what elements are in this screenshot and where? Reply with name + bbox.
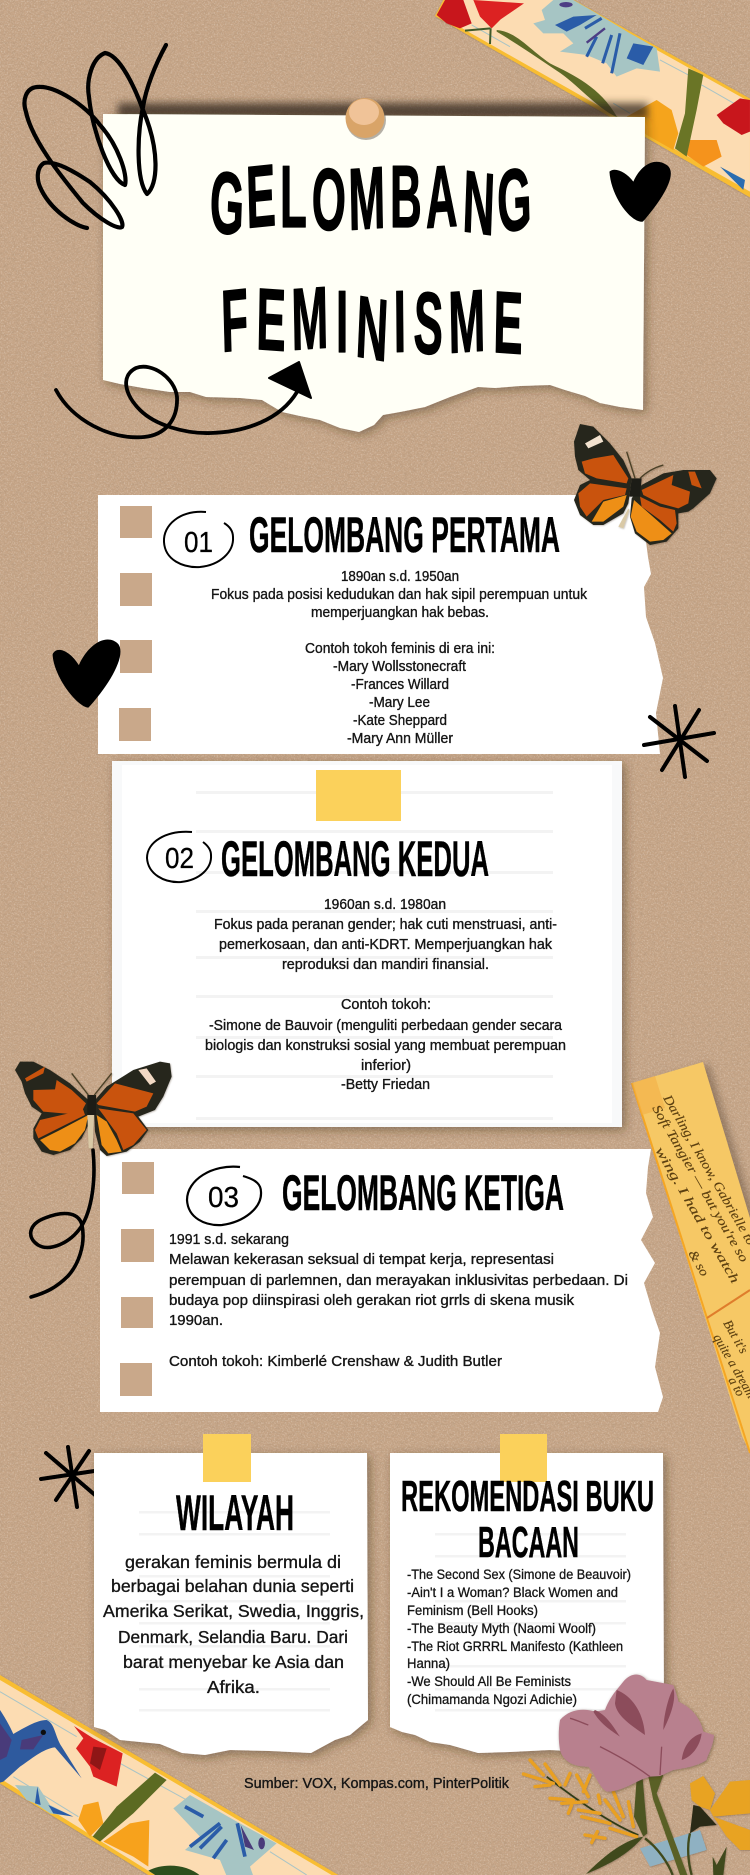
number badge 01 (164, 512, 233, 567)
body text: barat menyebar ke Asia dan (123, 1652, 344, 1672)
body text: 1890an s.d. 1950an (341, 569, 459, 585)
number badge 02 (147, 832, 211, 882)
body text: -Betty Friedan (341, 1077, 430, 1093)
body text (211, 569, 588, 747)
body text: 1991 s.d. sekarang (169, 1232, 289, 1248)
title note: torn paper (103, 114, 645, 432)
body text: Fokus pada posisi kedudukan dan hak sipil perempuan untuk (211, 587, 588, 603)
book list: -The Riot GRRRL Manifesto (Kathleen (407, 1639, 623, 1654)
body text: Denmark, Selandia Baru. Dari (118, 1627, 348, 1647)
butterfly: left (15, 1062, 172, 1156)
scribble: top left loops (24, 45, 166, 228)
body text: gerakan feminis bermula di (125, 1552, 341, 1572)
binder holes (120, 1162, 154, 1396)
yellow handwritten paper strip: & so (685, 1247, 713, 1279)
title: GELOMBANG (208, 145, 533, 255)
body text: 1960an s.d. 1980an (324, 897, 446, 913)
book list: -The Second Sex (Simone de Beauvoir) (407, 1567, 631, 1582)
number badge 03 (187, 1167, 261, 1225)
yellow handwritten paper strip: a to (725, 1374, 749, 1399)
source line: Sumber: VOX, Kompas.com, PinterPolitik (244, 1776, 510, 1792)
body text (169, 1232, 628, 1370)
body text: Amerika Serikat, Swedia, Inggris, (103, 1601, 364, 1621)
title (208, 145, 533, 380)
yellow tape (203, 1434, 251, 1482)
panel: gelombang ketiga (100, 1149, 663, 1412)
pin (346, 98, 386, 140)
body text (205, 897, 566, 1093)
asterisk: right (644, 706, 714, 777)
body text: inferior) (361, 1058, 411, 1074)
yellow tape (500, 1434, 547, 1482)
body text: memperjuangkan hak bebas. (311, 605, 489, 621)
body text: Contoh tokoh: Kimberlé Crenshaw & Judith Butler (169, 1354, 502, 1370)
heading: BACAAN (478, 1518, 579, 1567)
body text: -Mary Ann Müller (347, 731, 453, 747)
body text: perempuan di parlemnen, dan merayakan inklusivitas perbedaan. Di (169, 1273, 628, 1289)
washi tape: top right floral (435, 0, 750, 197)
body text: Contoh tokoh: (341, 997, 431, 1013)
heart: left (53, 640, 120, 708)
yellow handwritten paper strip (632, 1062, 750, 1455)
heart: top right (609, 162, 671, 222)
yellow handwritten paper strip: wing. I had to watch (652, 1144, 743, 1286)
yellow tape (316, 770, 401, 821)
heading (401, 1472, 654, 1567)
heading: WILAYAH (176, 1485, 294, 1541)
body text (103, 1552, 364, 1697)
number badge 02: 02 (165, 843, 194, 875)
panel: wilayah (94, 1434, 368, 1755)
number badge 03: 03 (208, 1182, 239, 1214)
book list (407, 1567, 631, 1707)
body text: budaya pop diinspirasi oleh gerakan riot grrls di skena musik (169, 1293, 575, 1309)
title note shadow (118, 103, 648, 119)
book list: -We Should All Be Feminists (407, 1674, 571, 1689)
body text: 1990an. (169, 1313, 223, 1329)
body text: -Kate Sheppard (353, 713, 447, 729)
body text: -Mary Lee (369, 695, 430, 711)
body text: Fokus pada peranan gender; hak cuti menstruasi, anti- (214, 917, 557, 933)
swirl arrow (56, 362, 311, 437)
body text: biologis dan konstruksi sosial yang membuat perempuan (205, 1038, 566, 1054)
book list: Hanna) (407, 1656, 450, 1671)
asterisk: bottom left (41, 1447, 101, 1507)
number badge 01: 01 (184, 527, 213, 559)
title: FEMINISME (220, 268, 524, 380)
body text: reproduksi dan mandiri finansial. (282, 957, 489, 973)
body text: berbagai belahan dunia seperti (111, 1576, 354, 1596)
washi tape: bottom left floral (0, 1675, 340, 1875)
body text: -Mary Wollsstonecraft (333, 659, 466, 675)
body text: Melawan kekerasan seksual di tempat kerja, representasi (169, 1252, 554, 1268)
panel: rekomendasi buku bacaan (390, 1434, 664, 1753)
binder holes (119, 506, 152, 741)
book list: Feminism (Bell Hooks) (407, 1603, 538, 1618)
book list: (Chimamanda Ngozi Adichie) (407, 1692, 577, 1707)
yellow handwritten paper strip: Soft Tangier — but you're so (649, 1102, 750, 1265)
butterfly: top right (574, 424, 717, 545)
body text: pemerkosaan, dan anti-KDRT. Memperjuangkan hak (219, 937, 553, 953)
body text: -Frances Willard (351, 677, 449, 693)
heading: GELOMBANG KEDUA (221, 831, 489, 887)
flower illustration: bottom right (523, 1675, 750, 1875)
body text: Contoh tokoh feminis di era ini: (305, 641, 495, 657)
swirl string (31, 1150, 94, 1297)
body text: -Simone de Bauvoir (menguliti perbedaan gender secara (209, 1018, 563, 1034)
panel: gelombang pertama (98, 495, 663, 754)
body text: Afrika. (207, 1677, 260, 1697)
book list: -Ain't I a Woman? Black Women and (407, 1585, 618, 1600)
book list: -The Beauty Myth (Naomi Woolf) (407, 1621, 596, 1636)
yellow handwritten paper strip: Darling, I know, Gabrielle to (660, 1091, 750, 1248)
panel: gelombang kedua (112, 761, 622, 1127)
